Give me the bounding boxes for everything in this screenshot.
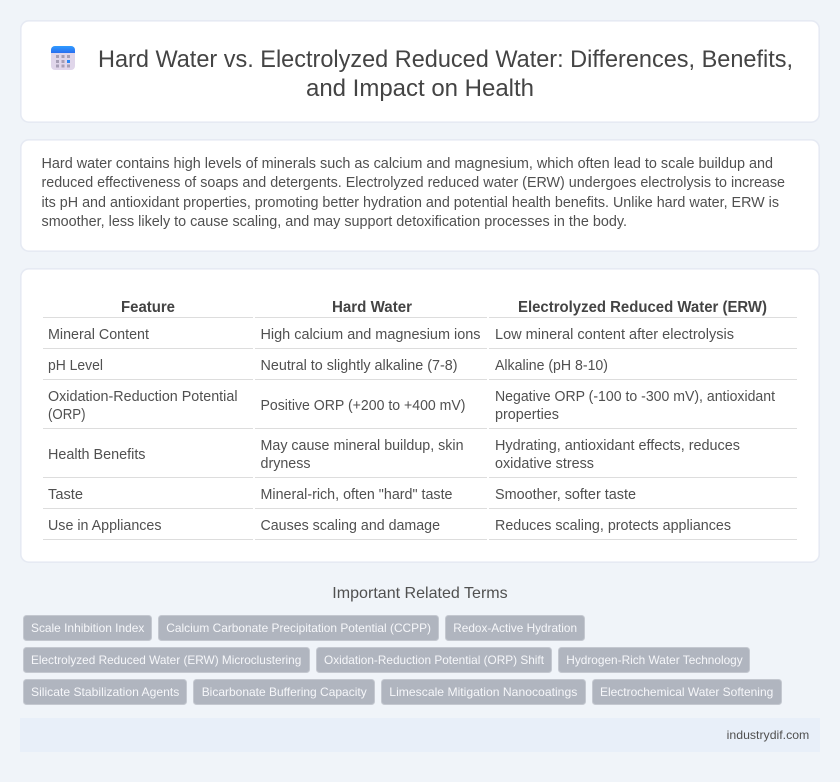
related term tags — [24, 616, 782, 704]
row: taste: Smoother, softer taste — [495, 487, 636, 503]
tag: orp shift: Oxidation-Reduction Potential (ORP) Shift — [324, 653, 545, 667]
panel: comparison table — [21, 269, 819, 562]
tag: ccpp — [158, 616, 438, 640]
row: oxidation-reduction potential: Negative ORP (-100 to -300 mV), antioxidant — [495, 389, 775, 405]
row: pH level: Alkaline (pH 8-10) — [495, 358, 608, 374]
row: pH level: Neutral to slightly alkaline (7-8) — [260, 358, 458, 374]
tag: limescale mitigation nanocoatings: Limescale Mitigation Nanocoatings — [389, 685, 577, 699]
tag: erw microclustering — [24, 648, 310, 672]
row: health benefits: dryness — [260, 456, 310, 472]
icon: calendar — [51, 46, 75, 70]
tag: redox-active hydration — [446, 616, 584, 640]
table header: Hard Water — [332, 299, 412, 316]
tag: bicarbonate buffering capacity — [194, 680, 374, 704]
row: use in appliances — [48, 518, 731, 534]
row: oxidation-reduction potential: properties — [495, 407, 559, 423]
row: health benefits: May cause mineral buildup, skin — [260, 438, 464, 454]
row: pH level — [48, 358, 608, 374]
row: oxidation-reduction potential: Positive ORP (+200 to +400 mV) — [260, 398, 466, 414]
intro paragraph: smoother, less likely to cause scaling, and may support detoxification processes in the body. — [42, 214, 627, 230]
row: taste: Mineral-rich, often "hard" taste — [260, 487, 452, 503]
table header — [121, 299, 767, 316]
intro paragraph — [42, 156, 785, 230]
row: mineral content — [48, 327, 734, 343]
intro paragraph: Hard water contains high levels of minerals such as calcium and magnesium, which often lead to scale buildup and — [42, 156, 773, 172]
row: use in appliances: Use in Appliances — [48, 518, 162, 534]
tag: silicate stabilization agents — [24, 680, 186, 704]
tag: ccpp: Calcium Carbonate Precipitation Potential (CCPP) — [166, 621, 431, 635]
row: health benefits: Hydrating, antioxidant effects, reduces — [495, 438, 740, 454]
tag: hydrogen-rich water technology — [558, 648, 750, 672]
row: oxidation-reduction potential: (ORP) — [48, 407, 86, 423]
tag: silicate stabilization agents: Silicate Stabilization Agents — [31, 685, 179, 699]
title: and Impact on Health — [306, 75, 534, 102]
row: health benefits: oxidative stress — [495, 456, 594, 472]
title — [98, 46, 793, 102]
tag: redox-active hydration: Redox-Active Hydration — [453, 621, 577, 635]
row: health benefits — [48, 438, 740, 472]
row: taste — [48, 487, 636, 503]
intro paragraph: its pH and antioxidant properties, promoting better hydration and potential health benefits. Unlike hard water, ERW is — [42, 195, 779, 211]
row: pH level: pH Level — [48, 358, 103, 374]
heading: important related terms: Important Related Terms — [332, 585, 508, 602]
row: mineral content: Mineral Content — [48, 327, 149, 343]
row: mineral content: Low mineral content after electrolysis — [495, 327, 734, 343]
tag: orp shift — [316, 648, 552, 672]
tag: hydrogen-rich water technology: Hydrogen-Rich Water Technology — [566, 653, 743, 667]
tag: limescale mitigation nanocoatings — [382, 680, 586, 704]
tag: scale inhibition index: Scale Inhibition Index — [31, 621, 144, 635]
row: oxidation-reduction potential — [48, 389, 775, 423]
panel: introduction — [21, 140, 819, 251]
row: oxidation-reduction potential: Oxidation-Reduction Potential — [48, 389, 238, 405]
tag: bicarbonate buffering capacity: Bicarbonate Buffering Capacity — [202, 685, 367, 699]
row: use in appliances: Causes scaling and damage — [260, 518, 440, 534]
table header: Electrolyzed Reduced Water (ERW) — [518, 299, 767, 316]
title: Hard Water vs. Electrolyzed Reduced Water: Differences, Benefits, — [98, 46, 793, 73]
tag: electrochemical water softening: Electrochemical Water Softening — [600, 685, 773, 699]
tag: electrochemical water softening — [592, 680, 782, 704]
row: taste: Taste — [48, 487, 83, 503]
footer — [20, 718, 820, 752]
tag: erw microclustering: Electrolyzed Reduced Water (ERW) Microclustering — [31, 653, 301, 667]
row: mineral content: High calcium and magnesium ions — [260, 327, 480, 343]
intro paragraph: reduced effectiveness of soaps and detergents. Electrolyzed reduced water (ERW) undergoes electrolysis to increase — [42, 175, 785, 191]
panel: header — [21, 21, 819, 122]
row: health benefits: Health Benefits — [48, 447, 146, 463]
footer: industrydif.com — [727, 728, 809, 742]
table header: Feature — [121, 299, 175, 316]
row: use in appliances: Reduces scaling, protects appliances — [495, 518, 731, 534]
tag: scale inhibition index — [24, 616, 152, 640]
